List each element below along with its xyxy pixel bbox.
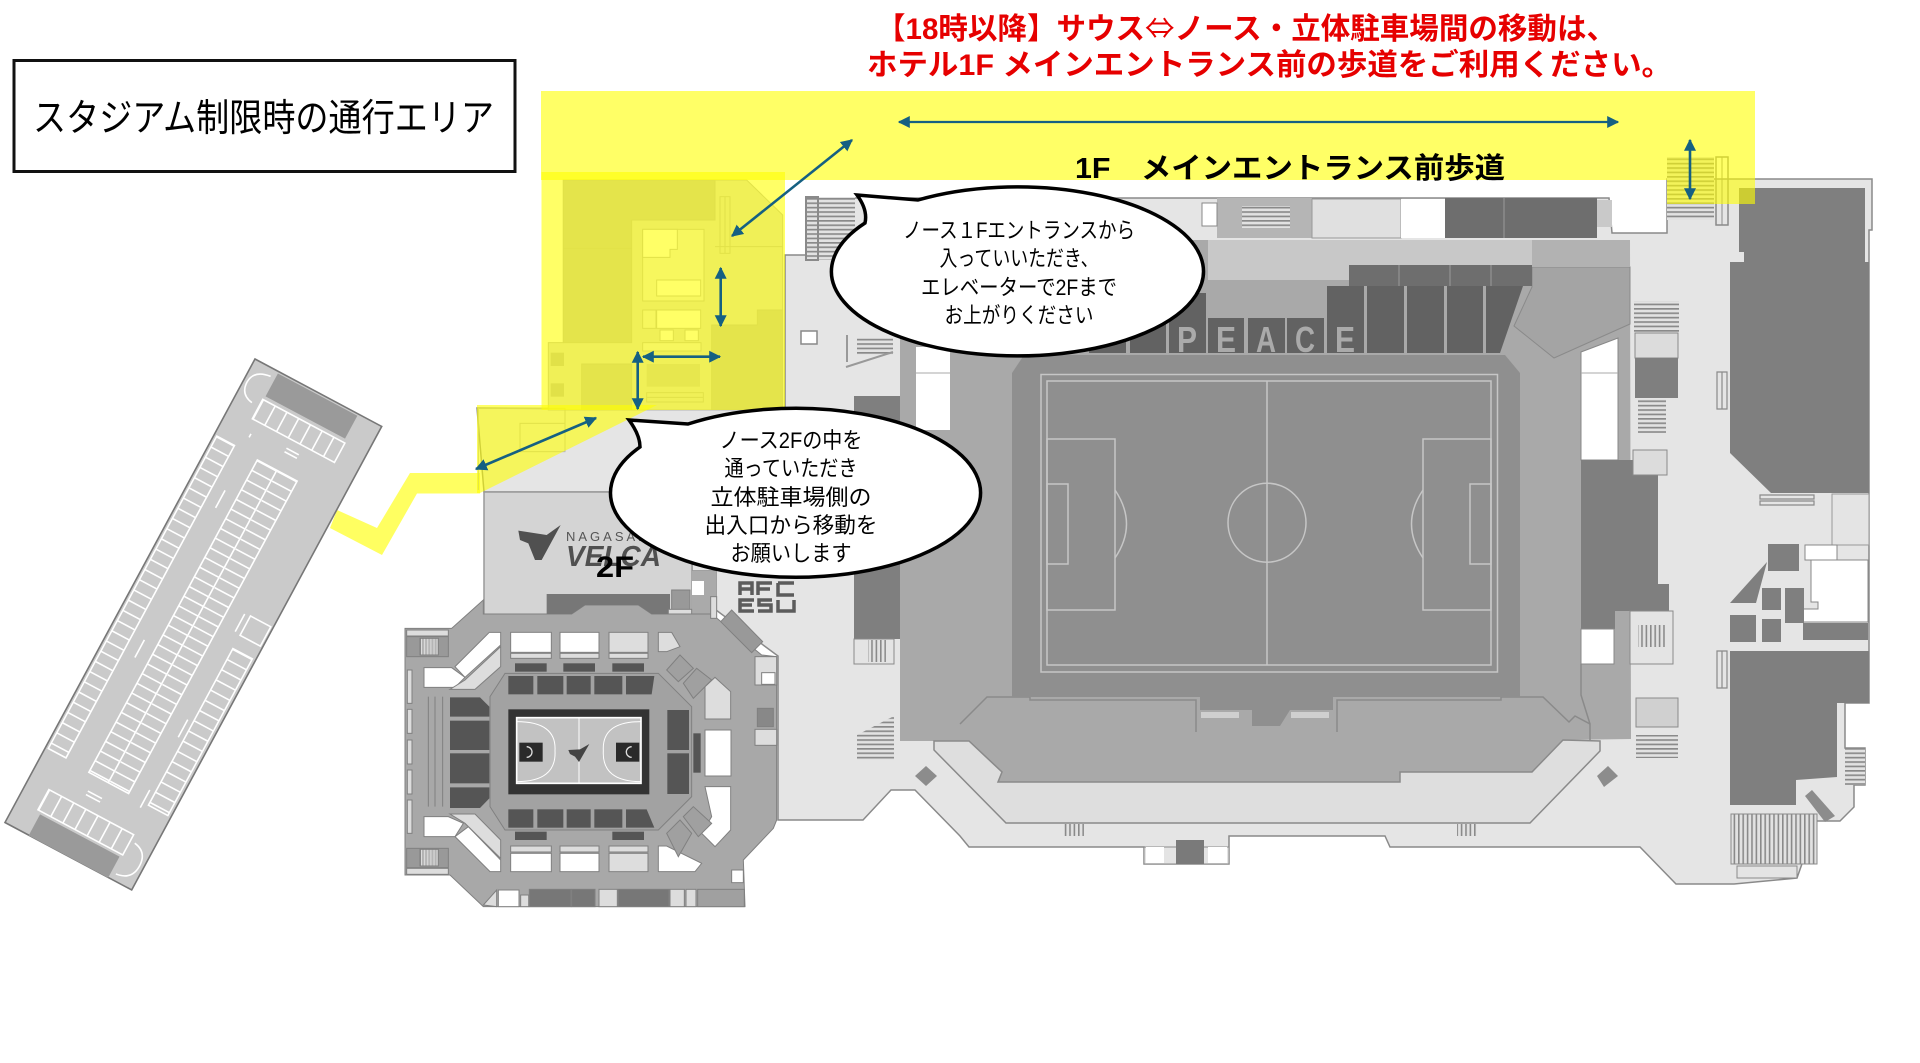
car park end building top [266, 373, 357, 439]
south east dark building [1730, 188, 1869, 878]
lower concourse band [934, 740, 1600, 823]
north building floor plan [478, 180, 783, 490]
logo wordmark: NAGASAKI [566, 529, 656, 544]
speech bubble: north 2F passage: 立体駐車場側の [710, 485, 872, 510]
title box [14, 60, 515, 172]
arena south row rooms [483, 889, 744, 907]
PEACE letters: C [1295, 319, 1315, 360]
arena east service core [755, 657, 777, 745]
arrow: north building vertical [719, 268, 722, 326]
arena corner rooms [424, 610, 763, 883]
speech bubble: north 2F passage: 通っていただき [724, 456, 858, 481]
walkway label: 1F メインエントランス前歩道 [1075, 152, 1505, 185]
arena rooms bottom [511, 846, 702, 872]
arrow: walkway to north entrance [732, 140, 852, 236]
arrows [476, 122, 1690, 469]
2F area panel: VELCA [566, 541, 661, 573]
PEACE letters: P [1177, 319, 1197, 360]
south entrance and kiosks [1064, 824, 1477, 864]
basketball court [508, 709, 649, 794]
car park end building bottom [29, 814, 120, 878]
north stand seats and PEACE lettering [1089, 240, 1630, 360]
PEACE letters: A [1256, 319, 1276, 360]
speech bubble: north 1F entrance [831, 187, 1203, 356]
speech bubble: north 2F passage [611, 408, 981, 577]
stadium detail lines lower stand [960, 664, 1590, 740]
paving diamonds [915, 766, 1618, 787]
2F area panel [484, 492, 716, 615]
red notice: ホテル1F メインエントランス前の歩道をご利用ください。 [867, 48, 1672, 82]
arrow: walkway [899, 121, 1618, 123]
speech bubble: north 1F entrance: お上がりください [944, 303, 1094, 328]
title box: スタジアム制限時の通行エリア [33, 98, 494, 140]
yellow zone: north building [542, 172, 785, 410]
basketball arena plan [405, 590, 777, 907]
north top row rooms [1202, 198, 1612, 238]
red notice [867, 4, 1672, 82]
block logo on plaza [740, 583, 794, 611]
speech bubble: north 1F entrance: エレベーターで2Fまで [921, 275, 1117, 300]
arena bowl [490, 673, 692, 830]
PEACE letters [1177, 319, 1355, 360]
arena west service strips [407, 630, 448, 874]
arena rooms top [511, 632, 680, 658]
2F label: 2F [596, 551, 634, 584]
speech bubble: north 2F passage: お願いします [730, 541, 852, 566]
arrow: east stairs [1689, 140, 1691, 199]
stand centre tunnel [1200, 697, 1333, 726]
speech bubble: north 2F passage: 出入口から移動を [704, 513, 878, 538]
west side stairs and rooms [801, 197, 950, 760]
PEACE letters: E [1216, 319, 1236, 360]
football pitch [1012, 355, 1520, 697]
yellow zone: main entrance walkway [541, 91, 1755, 180]
parking stalls [11, 367, 376, 883]
speech bubble: north 1F entrance: 入っていいただき、 [940, 246, 1098, 271]
speech bubble: north 1F entrance: ノース１Fエントランスから [903, 218, 1135, 243]
PEACE letters: E [1335, 319, 1355, 360]
speech bubble: north 2F passage: ノース2Fの中を [720, 428, 862, 453]
arena seats [450, 663, 701, 840]
yellow zone: link to car park [477, 405, 657, 493]
arrow: north building horizontal [643, 355, 720, 358]
arrow: north building lower vertical [636, 352, 639, 409]
east entrance stairs [1667, 157, 1728, 225]
logo mark [518, 525, 561, 560]
car park plan [5, 359, 382, 890]
arrow: to car park [476, 418, 596, 469]
ground floor plan [477, 179, 1872, 884]
east side rooms [1581, 301, 1814, 758]
yellow zone: east stairs [1667, 180, 1755, 204]
red notice: 【18時以降】サウス⇔ノース・立体駐車場間の移動は、 [876, 4, 1616, 48]
yellow connector path under car park [330, 473, 480, 555]
stadium body [900, 240, 1631, 782]
